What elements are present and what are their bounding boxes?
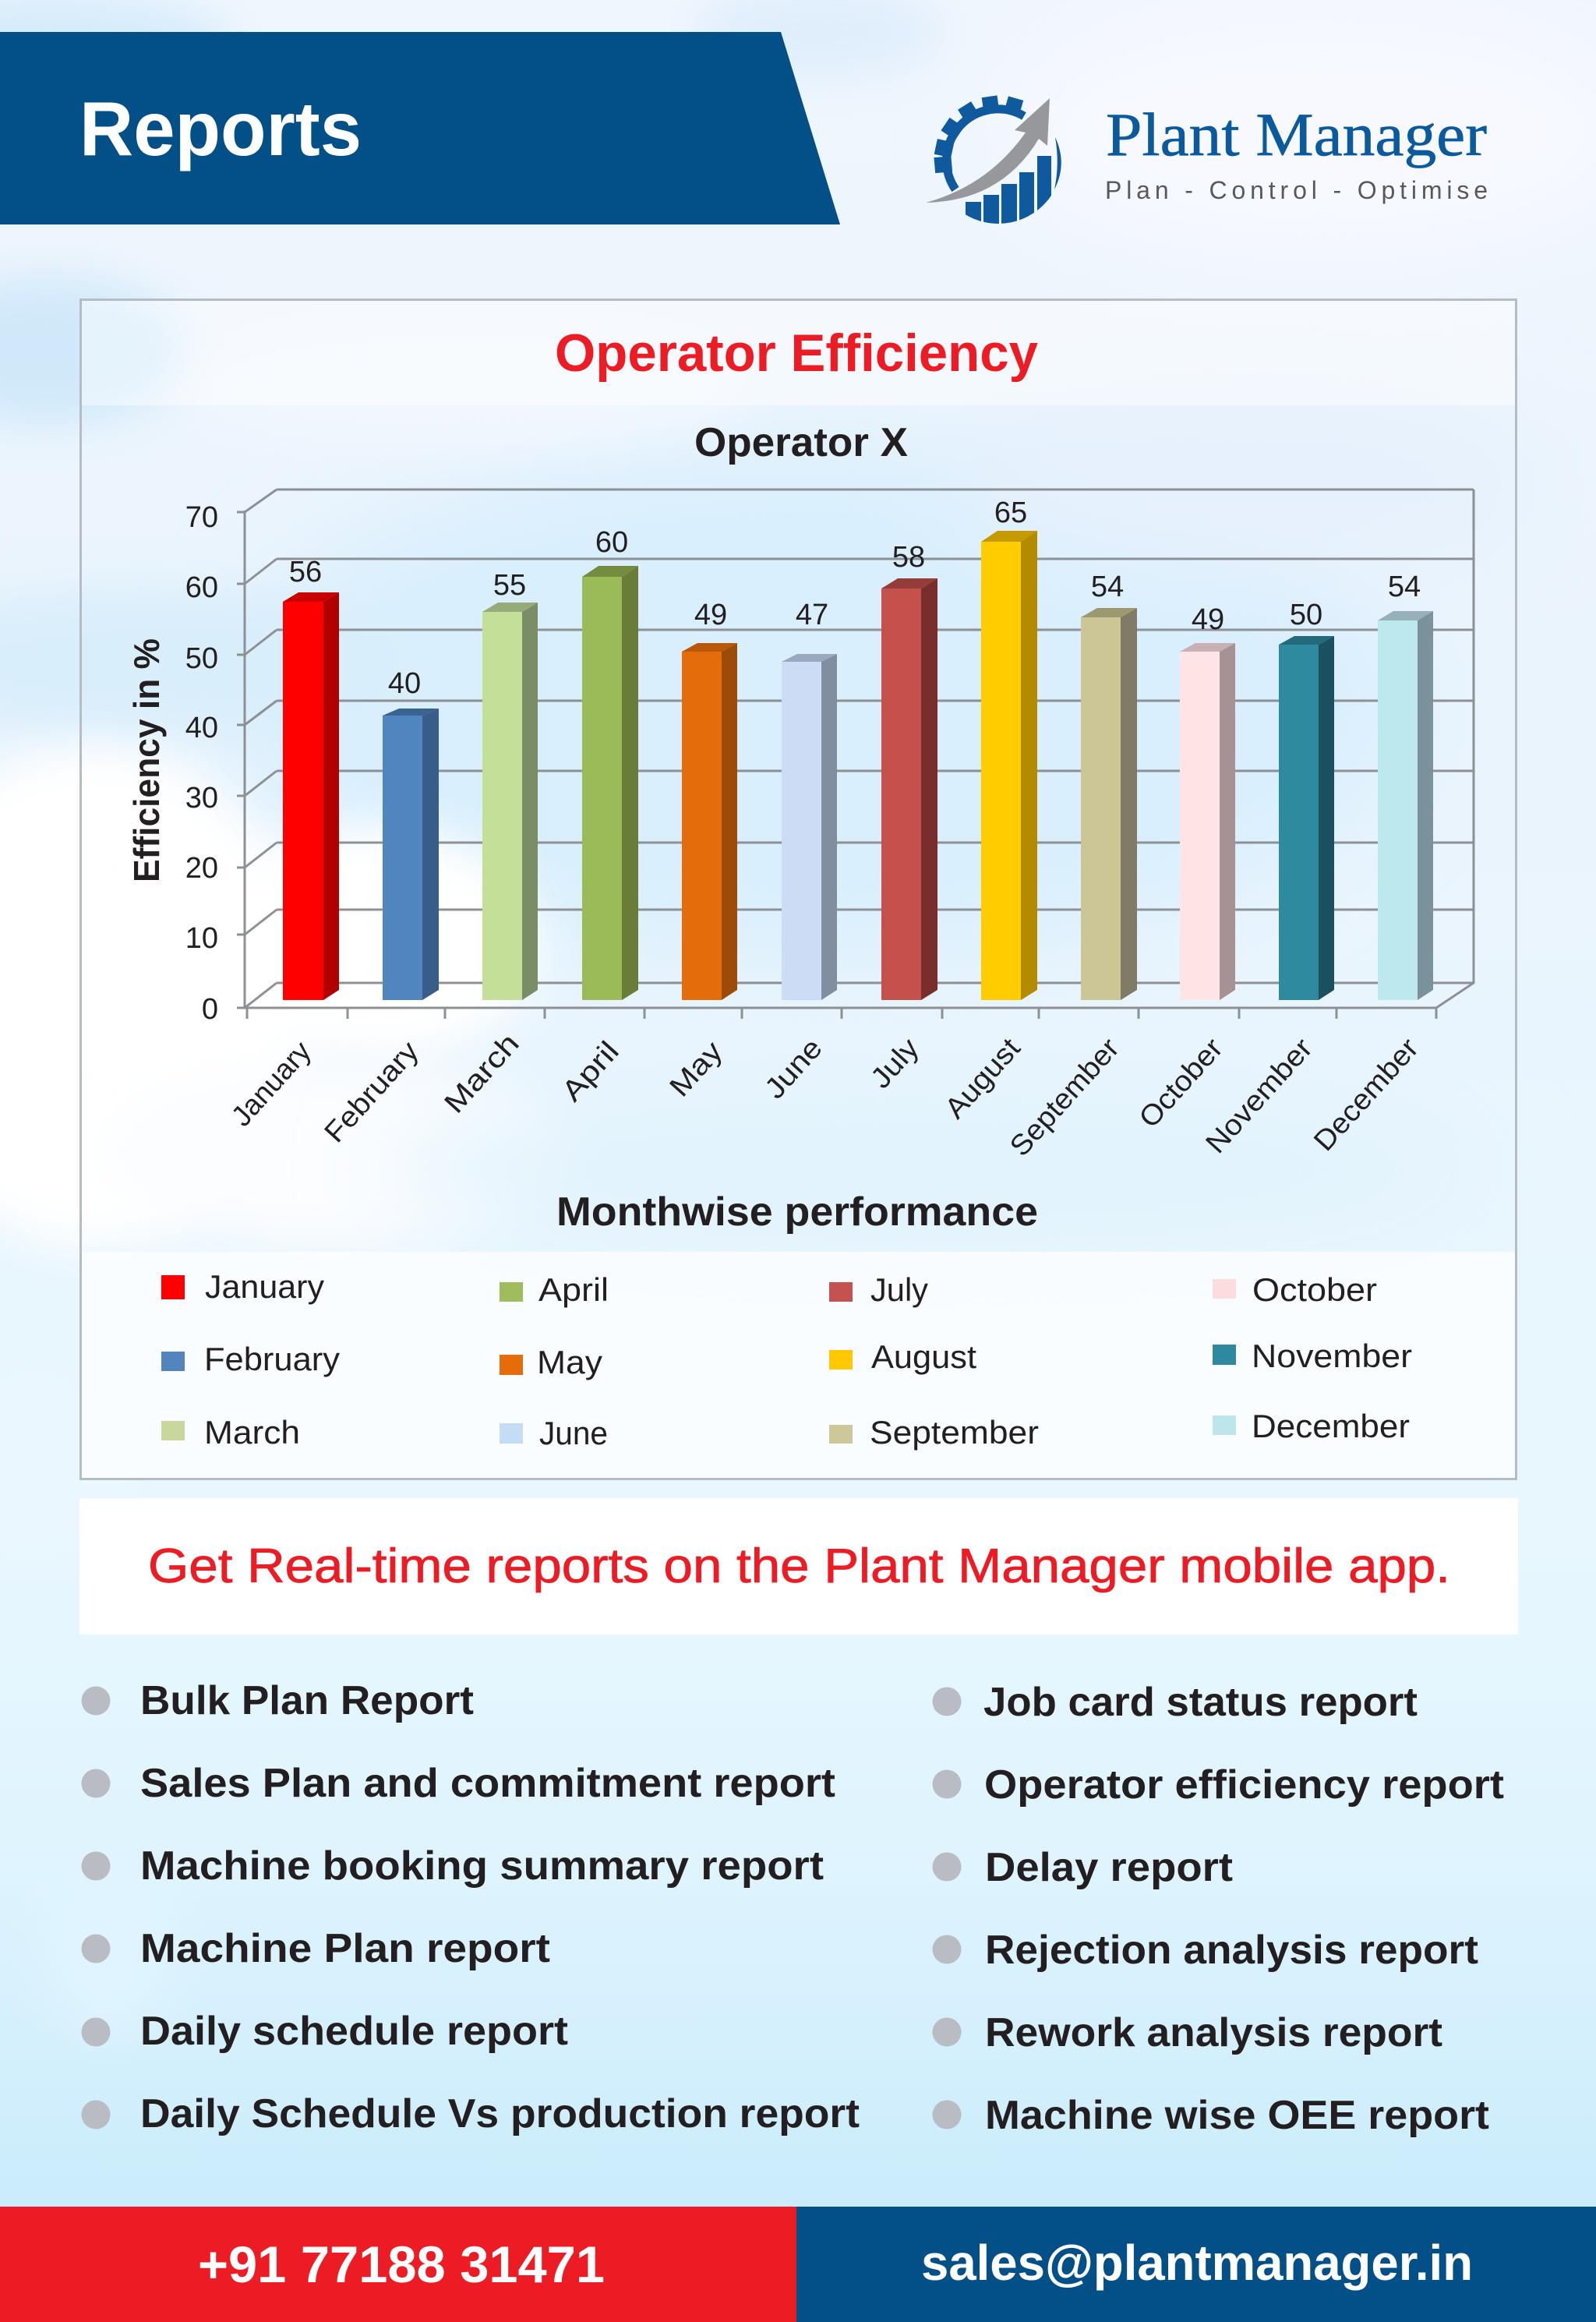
list: reports right column: Rejection analysis report (985, 1928, 1478, 1973)
y axis labels: 0 (202, 993, 218, 1026)
bar: August 65 (981, 531, 1037, 1000)
data labels: 49 (1192, 603, 1224, 636)
list: reports right column (932, 1680, 1504, 2138)
callout: mobile app banner (79, 1498, 1518, 1635)
panel: operator efficiency (81, 299, 1517, 1479)
legend: September (870, 1414, 1039, 1451)
bar: October 49 (1180, 643, 1235, 1000)
footer: phone (0, 2207, 796, 2322)
bar: February 40 (383, 709, 439, 1000)
bar: January 56 (283, 592, 339, 1000)
x axis month labels: July (864, 1032, 925, 1094)
bar: May 49 (682, 643, 737, 1000)
x axis month labels: May (663, 1034, 729, 1103)
data labels: 49 (694, 599, 727, 631)
legend: May (537, 1344, 602, 1380)
x axis month labels: November (1199, 1032, 1319, 1159)
data labels: 58 (892, 541, 925, 574)
chart title: Operator X (694, 420, 908, 465)
data labels: 50 (1290, 599, 1322, 631)
list: reports right column: Job card status report (983, 1680, 1418, 1725)
bar: March 55 (482, 603, 538, 1000)
data labels: 47 (796, 599, 828, 631)
list: reports right column: Machine wise OEE report (985, 2093, 1489, 2138)
y axis labels: 20 (185, 852, 218, 885)
bar: December 54 (1378, 611, 1433, 1000)
data labels: 40 (388, 667, 421, 700)
data labels (289, 497, 1421, 700)
x axis month labels (225, 1027, 1425, 1162)
y axis labels: 70 (185, 501, 218, 534)
legend: December (1252, 1408, 1410, 1444)
logo tagline: Plan - Control - Optimise (1105, 176, 1488, 204)
x axis month labels: October (1132, 1032, 1229, 1134)
y axis labels: 60 (185, 571, 218, 604)
legend: January (205, 1268, 324, 1305)
y axis labels: 50 (185, 642, 218, 675)
list: reports left column (81, 1678, 860, 2136)
bar: April 60 (582, 566, 638, 1000)
legend: July (870, 1271, 928, 1308)
page title: Reports (79, 86, 362, 171)
header banner (0, 32, 840, 224)
list: reports right column: Operator efficiency report (984, 1762, 1504, 1808)
logo: Plant Manager (926, 95, 1488, 235)
list: reports left column: Daily schedule report (140, 2009, 568, 2054)
list: reports left column: Bulk Plan Report (140, 1678, 474, 1723)
footer: phone: +91 77188 31471 (198, 2235, 605, 2293)
bar chart: 3D monthly efficiency (185, 489, 1474, 1162)
legend: November (1252, 1338, 1412, 1374)
y axis labels: 30 (185, 782, 218, 815)
y axis labels: 40 (185, 712, 218, 744)
legend: August (871, 1338, 976, 1375)
list: reports left column: Sales Plan and commitment report (140, 1761, 835, 1806)
data labels: 56 (289, 556, 322, 588)
x axis month labels: February (318, 1035, 425, 1149)
bar: September 54 (1081, 608, 1137, 1000)
bar: June 47 (782, 654, 837, 1000)
x axis month labels: September (1004, 1032, 1125, 1162)
y axis title: Efficiency in % (126, 638, 167, 882)
data labels: 60 (595, 526, 628, 559)
data labels: 54 (1091, 571, 1124, 603)
bar: July 58 (881, 578, 937, 1000)
callout: mobile app banner: Get Real-time reports on the Plant Manager mobile app. (148, 1539, 1450, 1593)
list: reports left column: Machine booking summary report (140, 1843, 824, 1889)
x axis title: Monthwise performance (556, 1189, 1038, 1235)
data labels: 54 (1388, 571, 1421, 603)
x axis month labels: August (938, 1031, 1026, 1125)
list: reports left column: Daily Schedule Vs production report (140, 2091, 860, 2136)
legend: February (204, 1341, 340, 1377)
x axis month labels: April (556, 1035, 625, 1108)
data labels: 65 (994, 497, 1027, 529)
legend: March (204, 1414, 300, 1451)
logo wordmark: Plant Manager (1106, 101, 1487, 168)
bar: November 50 (1279, 636, 1334, 1000)
x axis month labels: March (438, 1027, 525, 1119)
list: reports right column: Delay report (985, 1845, 1233, 1890)
legend (161, 1268, 1412, 1451)
x axis month labels: January (225, 1035, 317, 1133)
list: reports right column: Rework analysis report (985, 2010, 1442, 2055)
footer: email (796, 2207, 1596, 2322)
data labels: 55 (493, 569, 526, 602)
legend: June (539, 1415, 608, 1451)
footer: email: sales@plantmanager.in (921, 2235, 1473, 2291)
x axis month labels: December (1308, 1032, 1425, 1157)
x axis month labels: June (758, 1032, 828, 1104)
list: reports left column: Machine Plan report (140, 1926, 550, 1971)
legend: October (1252, 1271, 1377, 1308)
y axis labels: 10 (185, 922, 218, 955)
y axis labels (185, 501, 218, 1026)
panel heading: Operator Efficiency (555, 323, 1038, 383)
legend: April (538, 1271, 609, 1308)
logo icon: gear, bars and arrow (926, 95, 1061, 235)
chart grid and axes (237, 489, 1474, 1019)
